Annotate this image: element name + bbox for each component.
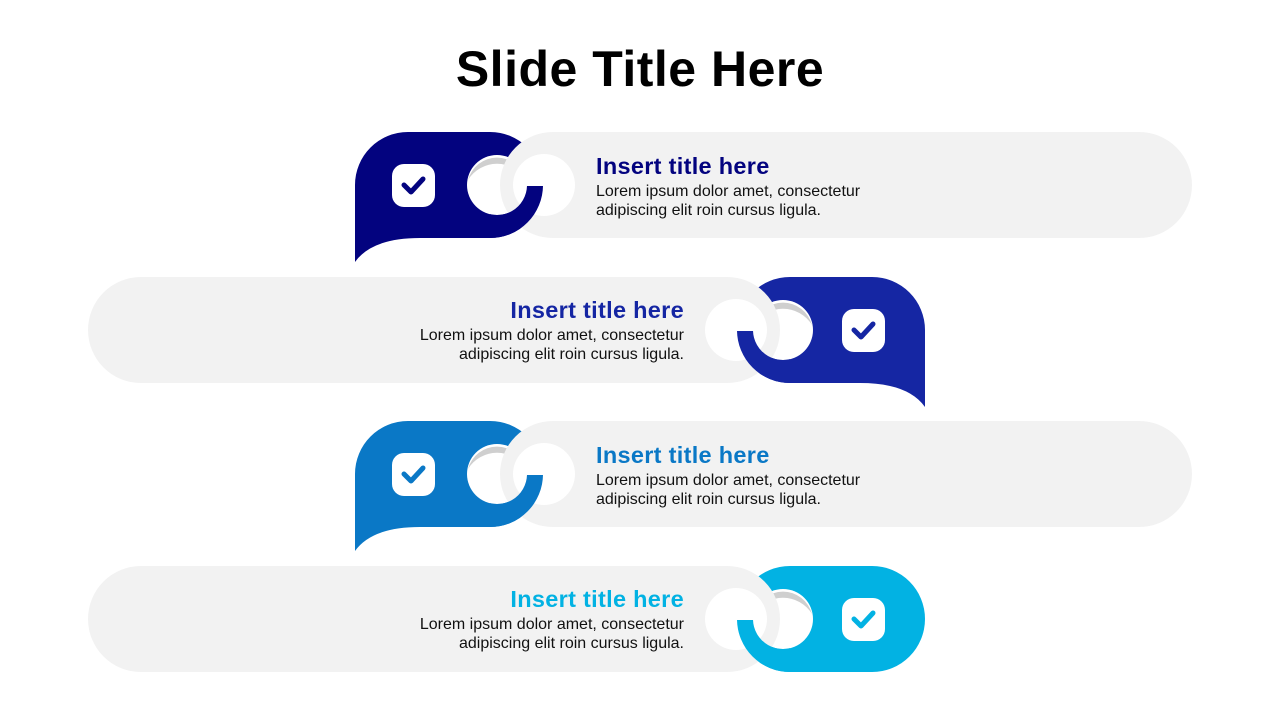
text 1	[596, 153, 861, 219]
gray pill 3	[500, 421, 1192, 527]
text 1: adipiscing elit roin cursus ligula.	[596, 202, 821, 219]
icon: checkbox 2	[842, 309, 885, 352]
text 2	[420, 297, 685, 363]
icon: checkbox 4	[842, 598, 885, 641]
row 2	[88, 277, 925, 407]
row 3	[355, 421, 1192, 551]
text 2: Lorem ipsum dolor amet, consectetur	[420, 327, 685, 344]
text 4: Lorem ipsum dolor amet, consectetur	[420, 616, 685, 633]
icon: checkbox 3	[392, 453, 435, 496]
link shape 1	[355, 132, 543, 262]
text 3	[596, 442, 861, 508]
link shape 3	[355, 421, 543, 551]
text 3: adipiscing elit roin cursus ligula.	[596, 491, 821, 508]
gray pill 1	[500, 132, 1192, 238]
gray pill 4	[88, 566, 780, 672]
row 4	[88, 566, 925, 672]
text 4: adipiscing elit roin cursus ligula.	[459, 635, 684, 652]
icon: checkbox 1	[392, 164, 435, 207]
text 3: Lorem ipsum dolor amet, consectetur	[596, 472, 861, 489]
text 1: Insert title here	[596, 153, 770, 179]
link shape 2	[737, 277, 925, 407]
text 4	[420, 586, 685, 652]
gray pill 2	[88, 277, 780, 383]
text 4: Insert title here	[510, 586, 684, 612]
link shape 4	[737, 566, 925, 672]
text 2: adipiscing elit roin cursus ligula.	[459, 346, 684, 363]
row 1	[355, 132, 1192, 262]
text 3: Insert title here	[596, 442, 770, 468]
title: Slide Title Here	[456, 41, 824, 97]
text 2: Insert title here	[510, 297, 684, 323]
text 1: Lorem ipsum dolor amet, consectetur	[596, 183, 861, 200]
